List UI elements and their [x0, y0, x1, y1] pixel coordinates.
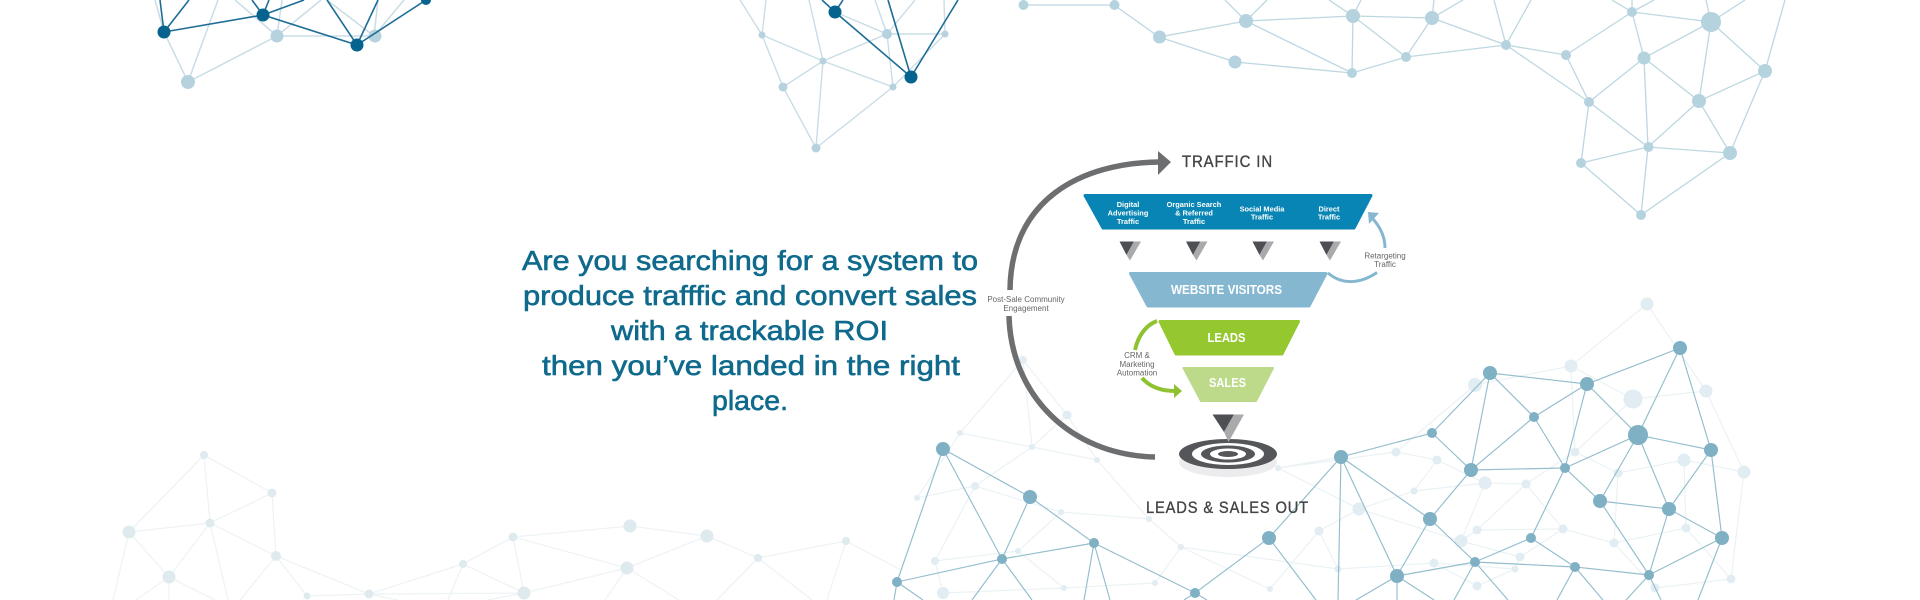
label: social media traffic: Traffic	[1251, 212, 1273, 222]
funnel tier: sales	[1184, 368, 1273, 401]
label: post-sale community engagement: Post-Sale Community	[987, 295, 1065, 304]
label: direct traffic: Direct	[1319, 204, 1339, 214]
arrow: CRM loop	[1135, 321, 1182, 398]
label: CRM and marketing automation: CRM &	[1124, 351, 1150, 360]
label: digital advertising traffic: Advertising	[1108, 208, 1149, 218]
label: retargeting traffic: Retargeting	[1364, 252, 1406, 260]
funnel tier: website visitors: WEBSITE VISITORS	[1171, 282, 1282, 297]
label: digital advertising traffic: Digital	[1117, 200, 1139, 209]
funnel tier: website visitors	[1130, 274, 1326, 306]
funnel tier: leads	[1160, 322, 1298, 354]
network: dark top centre	[740, 0, 958, 152]
icon: down triangle 2	[1186, 242, 1208, 260]
label: digital advertising traffic: Traffic	[1117, 217, 1139, 226]
label: CRM and marketing automation: Automation	[1117, 368, 1157, 378]
headline text: then you’ve landed in the right	[542, 350, 960, 381]
arrow: retargeting loop	[1328, 212, 1385, 282]
label: organic search and referred traffic: & Referred	[1175, 208, 1213, 218]
funnel tier: traffic sources	[1085, 196, 1371, 228]
icon: target with pointer	[1179, 414, 1277, 477]
label: retargeting traffic: Traffic	[1374, 260, 1396, 269]
label: direct traffic: Traffic	[1318, 212, 1340, 222]
funnel diagram	[987, 151, 1406, 517]
label: organic search and referred traffic: Organic Search	[1167, 200, 1221, 209]
label: post-sale community engagement: Engagement	[1003, 304, 1049, 313]
icon: down triangle 1	[1120, 242, 1141, 260]
network: dark top left	[155, 0, 431, 89]
network: faint layer bottom right	[914, 298, 1750, 599]
icon: down triangle 4	[1320, 242, 1341, 260]
label: traffic in: TRAFFIC IN	[1182, 152, 1273, 171]
label: CRM and marketing automation: Marketing	[1119, 360, 1155, 369]
label: social media traffic: Social Media	[1240, 204, 1284, 214]
arrow: post-sale loop upper arc	[1010, 151, 1171, 290]
label: leads and sales out: LEADS & SALES OUT	[1146, 498, 1309, 517]
network: light top right	[1018, 0, 1785, 220]
arrow: post-sale loop lower arc	[1009, 316, 1155, 457]
network: faint bottom left	[113, 451, 901, 600]
headline text: Are you searching for a system to	[522, 245, 978, 276]
headline text: produce trafffic and convert sales	[523, 280, 977, 311]
funnel tier: leads: LEADS	[1208, 330, 1246, 345]
headline text	[522, 245, 978, 416]
headline text: with a trackable ROI	[610, 315, 888, 346]
headline text: place.	[712, 385, 788, 416]
label: organic search and referred traffic: Traffic	[1183, 217, 1205, 226]
network: mid-tone bottom right	[892, 341, 1729, 600]
funnel tier: sales: SALES	[1209, 375, 1246, 390]
icon: down triangle 3	[1252, 242, 1274, 260]
